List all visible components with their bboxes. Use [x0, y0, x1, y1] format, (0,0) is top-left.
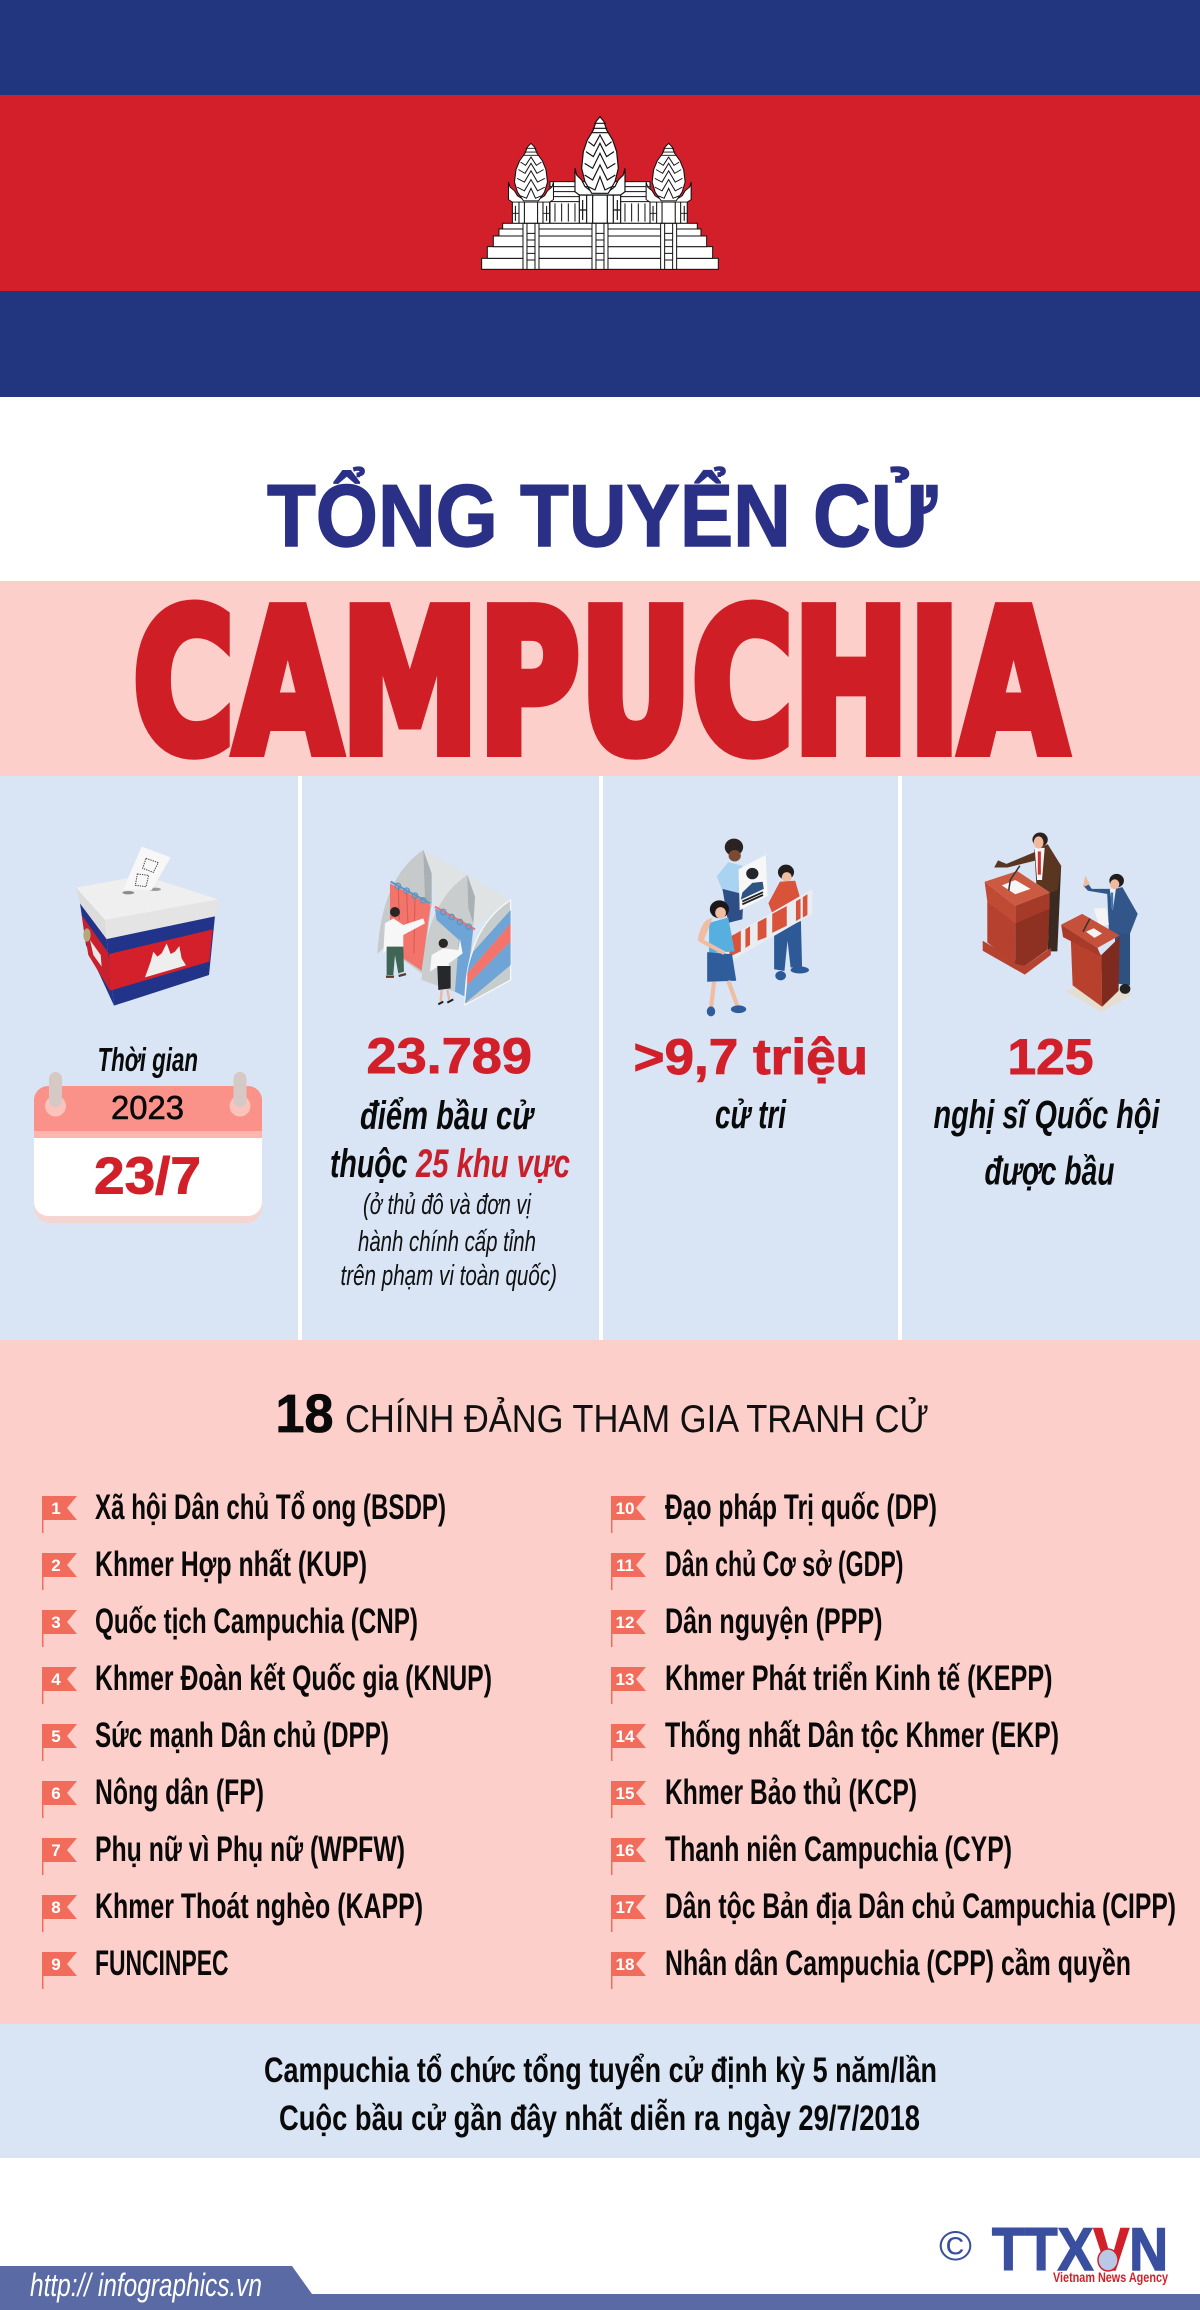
text: cử tri: cử tri: [715, 1093, 787, 1137]
footer: website bar: [0, 2266, 1200, 2310]
panel: four statistic columns background: [0, 776, 1200, 1340]
note: administrative scope: [340, 1189, 557, 1292]
party 3: [42, 1602, 418, 1647]
calendar: 23/7 2023: 2023: [111, 1089, 184, 1126]
heading: 18 parties contest: [276, 1384, 929, 1444]
party 2: 2: [51, 1556, 61, 1575]
party 3: Quốc tịch Campuchia (CNP): [95, 1602, 418, 1641]
party 1: Xã hội Dân chủ Tổ ong (BSDP): [95, 1488, 446, 1527]
calendar: 23/7 2023: [34, 1072, 262, 1223]
party 15: [611, 1773, 917, 1818]
party 10: [611, 1488, 937, 1533]
party 5: [42, 1716, 389, 1761]
party 8: [42, 1887, 423, 1932]
party 12: 12: [616, 1613, 634, 1632]
party 3: 3: [51, 1613, 61, 1632]
party 16: 16: [616, 1841, 634, 1860]
text: thuộc 25 khu vực: [330, 1142, 570, 1186]
heading: 18 parties contest: CHÍNH ĐẢNG THAM GIA TRANH CỬ: [345, 1397, 929, 1441]
party 10: Đạo pháp Trị quốc (DP): [665, 1488, 937, 1527]
party 15: Khmer Bảo thủ (KCP): [665, 1773, 917, 1812]
logo: TTXVN copyright: Vietnam News Agency: [1053, 2269, 1168, 2285]
party 11: Dân chủ Cơ sở (GDP): [665, 1545, 904, 1584]
party 15: 15: [616, 1784, 634, 1803]
party 9: [42, 1944, 228, 1989]
stat: more than 9.7 million: >9,7 triệu: [634, 1029, 868, 1085]
calendar: 23/7 2023: 23/7: [94, 1148, 201, 1206]
party 8: 8: [51, 1898, 61, 1917]
heading: 18 parties contest: 18: [276, 1384, 334, 1444]
text: điểm bầu cử: điểm bầu cử: [360, 1094, 536, 1138]
text: thuộc 25 khu vực: 25 khu vực: [415, 1142, 570, 1186]
party 11: 11: [616, 1556, 634, 1575]
party 17: 17: [616, 1898, 634, 1917]
note: administrative scope: hành chính cấp tỉnh: [358, 1226, 536, 1258]
party 2: Khmer Hợp nhất (KUP): [95, 1545, 367, 1584]
party 7: Phụ nữ vì Phụ nữ (WPFW): [95, 1830, 405, 1869]
list: parties 10 to 18: [611, 1488, 1176, 1989]
panel: election note: Cuộc bầu cử gần đây nhất diễn ra ngày 29/7/2018: [279, 2098, 920, 2138]
party 4: 4: [51, 1670, 61, 1689]
party 16: Thanh niên Campuchia (CYP): [665, 1830, 1012, 1869]
party 13: 13: [616, 1670, 634, 1689]
title: Tổng tuyển cử: TỔNG TUYỂN CỬ: [267, 466, 937, 565]
party 9: 9: [51, 1955, 61, 1974]
list: parties 1 to 9: [42, 1488, 492, 1989]
text: thuộc 25 khu vực: thuộc: [330, 1142, 408, 1186]
label: Thời gian: Thời gian: [98, 1041, 198, 1078]
icon: voters with banner: [700, 839, 812, 1016]
party 14: 14: [616, 1727, 635, 1746]
party 13: Khmer Phát triển Kinh tế (KEPP): [665, 1659, 1052, 1698]
footer: website bar: http:// infographics.vn: [30, 2267, 262, 2303]
party 11: [611, 1545, 904, 1590]
panel: election note: [0, 2024, 1200, 2158]
icon: speakers at podiums: [983, 832, 1138, 1012]
text: nghị sĩ Quốc hội được bầu: được bầu: [984, 1150, 1114, 1194]
party 6: [42, 1773, 264, 1818]
party 12: Dân nguyện (PPP): [665, 1602, 882, 1641]
party 1: [42, 1488, 446, 1533]
note: administrative scope: trên phạm vi toàn quốc): [340, 1260, 557, 1292]
panel: parties background: [0, 1340, 1200, 2024]
logo: TTXVN copyright: ©: [939, 2222, 972, 2269]
party 6: 6: [51, 1784, 61, 1803]
party 5: Sức mạnh Dân chủ (DPP): [95, 1716, 389, 1755]
party 5: 5: [51, 1727, 61, 1746]
party 4: Khmer Đoàn kết Quốc gia (KNUP): [95, 1659, 492, 1698]
note: administrative scope: (ở thủ đô và đơn vị: [363, 1189, 532, 1221]
stat: 23.789: 23.789: [366, 1028, 532, 1084]
party 1: 1: [51, 1499, 61, 1518]
party 7: 7: [51, 1841, 61, 1860]
party 2: [42, 1545, 367, 1590]
party 8: Khmer Thoát nghèo (KAPP): [95, 1887, 423, 1926]
stat: 125: 125: [1008, 1029, 1094, 1085]
party 13: [611, 1659, 1052, 1704]
party 16: [611, 1830, 1012, 1875]
party 14: [611, 1716, 1059, 1761]
party 12: [611, 1602, 882, 1647]
party 18: [611, 1944, 1131, 1989]
party 4: [42, 1659, 492, 1704]
party 6: Nông dân (FP): [95, 1773, 264, 1812]
icon: ballot box: [76, 847, 218, 1006]
text: nghị sĩ Quốc hội được bầu: [934, 1093, 1160, 1194]
flag: blue and red bands: [0, 0, 1200, 397]
party 10: 10: [616, 1499, 634, 1518]
panel: election note: Campuchia tổ chức tổng tuyển cử định kỳ 5 năm/lần: [264, 2051, 937, 2090]
party 7: [42, 1830, 405, 1875]
party 18: 18: [616, 1955, 634, 1974]
party 9: FUNCINPEC: [95, 1944, 228, 1983]
logo: TTXVN copyright: TTXVN: [992, 2216, 1168, 2283]
icon: voting booths: [377, 850, 511, 1005]
icon: Angkor Wat emblem: [482, 117, 718, 269]
